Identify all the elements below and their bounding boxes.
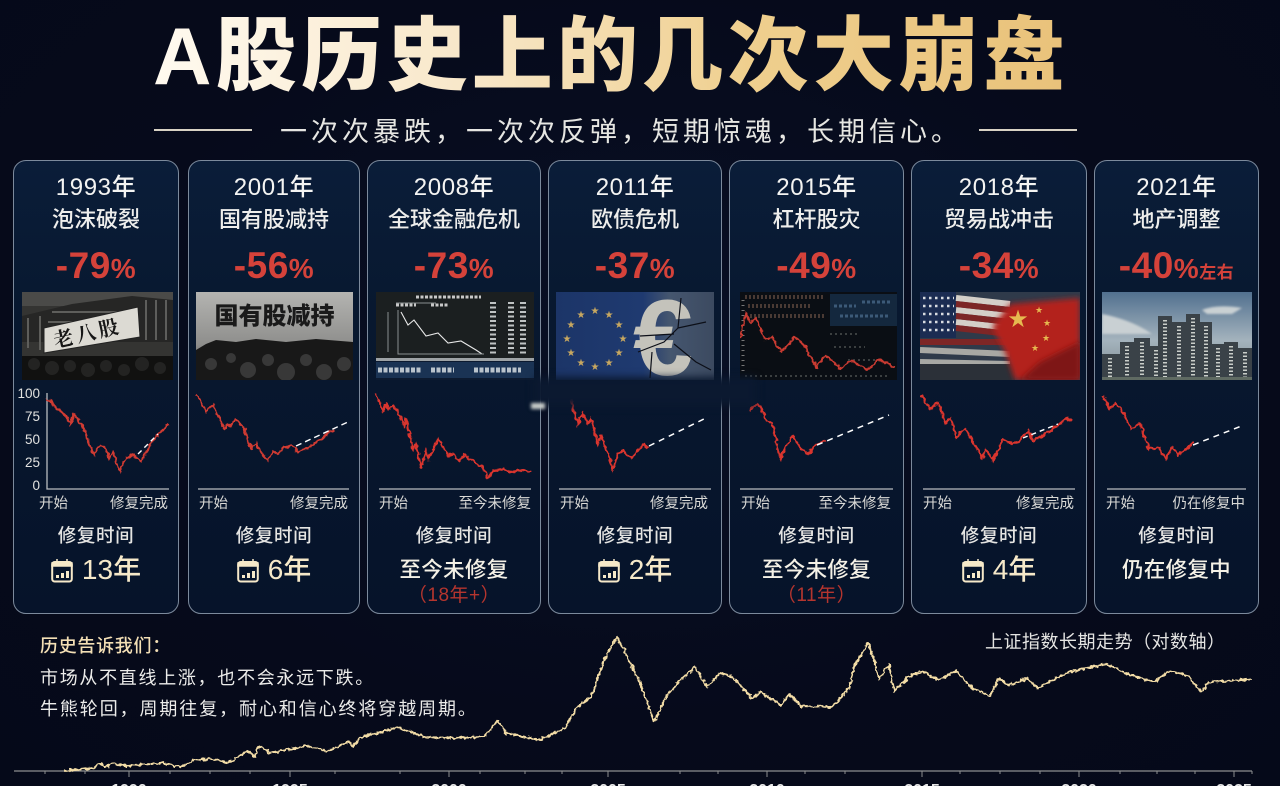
- line chart: [740, 402, 893, 490]
- photo: cracked euro: ★: [615, 348, 624, 359]
- year: 2001年: [234, 174, 314, 201]
- panel: 2015: [729, 160, 904, 614]
- axis start label: 开始: [560, 496, 589, 512]
- repair time value: 2年: [629, 554, 672, 585]
- repair time label: 修复时间: [597, 525, 673, 546]
- year: 2021年: [1136, 174, 1217, 201]
- photo: US and China flags: ★: [1042, 334, 1050, 344]
- y axis labels: 50: [25, 432, 40, 447]
- axis start label: 开始: [199, 496, 228, 512]
- photo: protest crowd: [196, 292, 353, 380]
- photo: cracked euro: ★: [577, 358, 586, 369]
- drawdown: -40%左右: [1119, 245, 1234, 286]
- takeaway heading: 历史告诉我们：: [40, 636, 171, 656]
- drawdown: -56%: [234, 245, 314, 286]
- repair time value: 6年: [268, 554, 311, 585]
- line chart: [374, 393, 532, 490]
- event name: 贸易战冲击: [944, 207, 1054, 232]
- event name: 全球金融危机: [388, 207, 520, 232]
- y axis labels: 100: [17, 386, 40, 401]
- repair time label: 修复时间: [961, 525, 1037, 546]
- repair time value: [51, 554, 141, 585]
- chart title: 上证指数长期走势（对数轴）: [985, 632, 1226, 652]
- line chart: [1102, 394, 1246, 490]
- repair time value: 仍在修复中: [1122, 558, 1231, 582]
- year: 2018年: [959, 174, 1039, 201]
- axis end label: 修复完成: [650, 496, 708, 512]
- photo: US and China flags: ★: [1007, 305, 1029, 333]
- drawdown: -37%: [595, 245, 675, 286]
- panel: 2018: [911, 160, 1087, 614]
- photo: cracked euro: ★: [563, 334, 572, 345]
- takeaway text: [40, 636, 478, 719]
- repair time value: [598, 554, 672, 585]
- year: 2008年: [414, 174, 494, 201]
- repair time label: 修复时间: [416, 525, 492, 546]
- repair time label: 修复时间: [58, 525, 134, 546]
- axis end label: 修复完成: [1016, 496, 1074, 512]
- subtitle: 一次次暴跌，一次次反弹，短期惊魂，长期信心。: [280, 117, 962, 147]
- panel: 2021: [1094, 160, 1259, 614]
- repair time label: 修复时间: [778, 525, 855, 546]
- axis start label: 开始: [379, 496, 408, 512]
- photo: cracked euro: ★: [567, 320, 576, 331]
- takeaway line two: 牛熊轮回，周期往复，耐心和信心终将穿越周期。: [40, 699, 478, 719]
- photo: apartment towers: [1102, 292, 1252, 380]
- photo: cracked euro: ★: [567, 348, 576, 359]
- axis end label: 至今未修复: [458, 496, 531, 512]
- axis end label: 仍在修复中: [1172, 496, 1245, 512]
- photo: cracked euro: ★: [605, 310, 614, 321]
- axis end label: 修复完成: [290, 496, 348, 512]
- line chart: [559, 400, 711, 490]
- long-term index chart: [14, 636, 1252, 786]
- photo: cracked euro: ★: [619, 334, 628, 345]
- photo: US and China flags: ★: [1031, 344, 1039, 354]
- repair note: （11年）: [777, 585, 856, 606]
- photo: cracked euro: ★: [605, 358, 614, 369]
- event name: 泡沫破裂: [52, 207, 140, 232]
- photo: cracked euro: ★: [591, 306, 600, 317]
- drawdown: -49%: [776, 245, 857, 286]
- year and event: 1993年: [56, 174, 136, 201]
- drawdown: -79%: [56, 245, 136, 286]
- event name: 地产调整: [1132, 207, 1220, 232]
- panel: 2008: [367, 160, 541, 614]
- photo: 老八股 street scene: 老八股: [51, 315, 124, 353]
- photo: cracked euro: ★: [615, 320, 624, 331]
- repair time value: 4年: [993, 554, 1036, 585]
- year: 2011年: [596, 174, 674, 201]
- axis end label: 至今未修复: [818, 496, 891, 512]
- line chart with axes: [46, 393, 170, 490]
- axis start label: 开始: [1106, 496, 1135, 512]
- photo: cracked euro: ★: [591, 362, 600, 373]
- repair time value: 至今未修复: [399, 558, 508, 582]
- y axis labels: 25: [25, 455, 40, 470]
- photo: cracked euro: [556, 292, 714, 380]
- event name: 欧债危机: [591, 207, 679, 232]
- axis start label: 开始: [741, 496, 770, 512]
- photo: US and China flags: ★: [1035, 306, 1043, 316]
- panel: 2001: [188, 160, 360, 614]
- repair time value: [962, 554, 1036, 585]
- y axis labels: 75: [25, 409, 40, 424]
- repair time value: 至今未修复: [762, 558, 871, 582]
- drawdown: -73%: [414, 245, 494, 286]
- photo: US and China flags: ★: [1043, 319, 1051, 329]
- year: 2015年: [776, 174, 857, 201]
- axis start label: 开始: [39, 496, 68, 512]
- y axis labels: [17, 386, 40, 493]
- repair time value: 13年: [82, 554, 141, 585]
- panel: 1993: [13, 160, 179, 614]
- photo: market board: [376, 292, 534, 378]
- takeaway line one: 市场从不直线上涨，也不会永远下跌。: [40, 668, 375, 688]
- line chart: [195, 394, 349, 490]
- y axis labels: 0: [32, 478, 40, 493]
- axis start label: 开始: [923, 496, 952, 512]
- panel: 2011: [548, 160, 722, 614]
- drawdown: -34%: [959, 245, 1039, 286]
- repair note: （18年+）: [408, 585, 500, 606]
- repair time value: [237, 554, 311, 585]
- repair time label: 修复时间: [1138, 525, 1215, 546]
- line chart: [920, 394, 1075, 490]
- event name: 国有股减持: [219, 207, 329, 232]
- repair time label: 修复时间: [236, 525, 312, 546]
- photo: US and China flags: [920, 292, 1080, 380]
- photo: market crash screen: [740, 292, 897, 380]
- photo: protest crowd: 国有股减持: [214, 303, 334, 330]
- photo: cracked euro: ★: [577, 310, 586, 321]
- photo: 老八股 street scene: [22, 292, 173, 380]
- axis end label: 修复完成: [110, 496, 168, 512]
- event name: 杠杆股灾: [772, 207, 860, 232]
- title: A股历史上的几次大崩盘: [153, 12, 1069, 102]
